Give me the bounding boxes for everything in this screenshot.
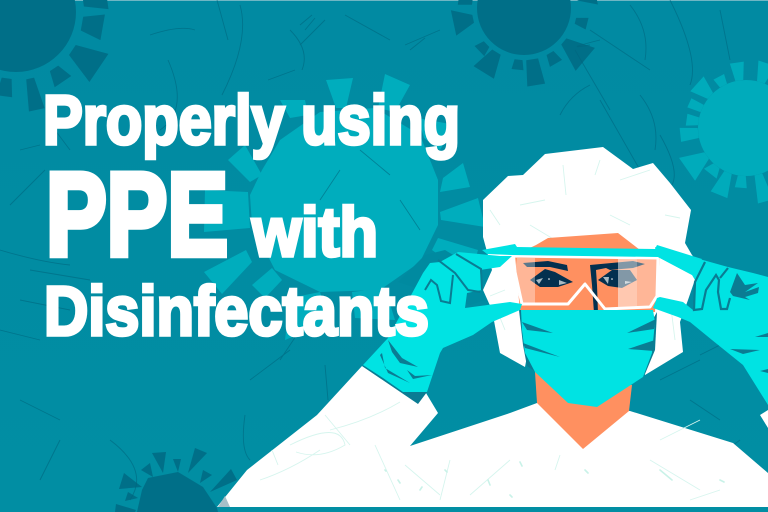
- right eye: [598, 270, 637, 288]
- virus: top left dark: [0, 0, 108, 111]
- face: [515, 233, 660, 312]
- eyes and brows: [523, 261, 645, 313]
- left eye: [530, 269, 573, 287]
- goggle lens tint: [515, 258, 658, 309]
- left glove: [362, 250, 522, 404]
- virus: bottom dark: [115, 448, 237, 512]
- virus: top centre dark: [451, 0, 598, 86]
- title line 1: Properly using: [43, 81, 460, 159]
- neck: [535, 372, 632, 449]
- title word: with: with: [251, 193, 378, 271]
- goggle strap: [482, 244, 702, 275]
- title word: PPE: PPE: [46, 149, 228, 281]
- goggle frame: [512, 256, 658, 309]
- left brow: [523, 261, 568, 271]
- mask: [519, 310, 657, 407]
- gown: [217, 366, 768, 507]
- right brow and nose shadow: [590, 261, 645, 313]
- hood: [483, 147, 700, 375]
- right glove: [653, 247, 768, 428]
- figure: healthcare worker in PPE: [217, 147, 768, 507]
- virus: top right light: [679, 61, 768, 203]
- virus: centre light: [204, 74, 485, 340]
- title line 3: Disinfectants: [44, 272, 429, 350]
- title: [43, 81, 460, 350]
